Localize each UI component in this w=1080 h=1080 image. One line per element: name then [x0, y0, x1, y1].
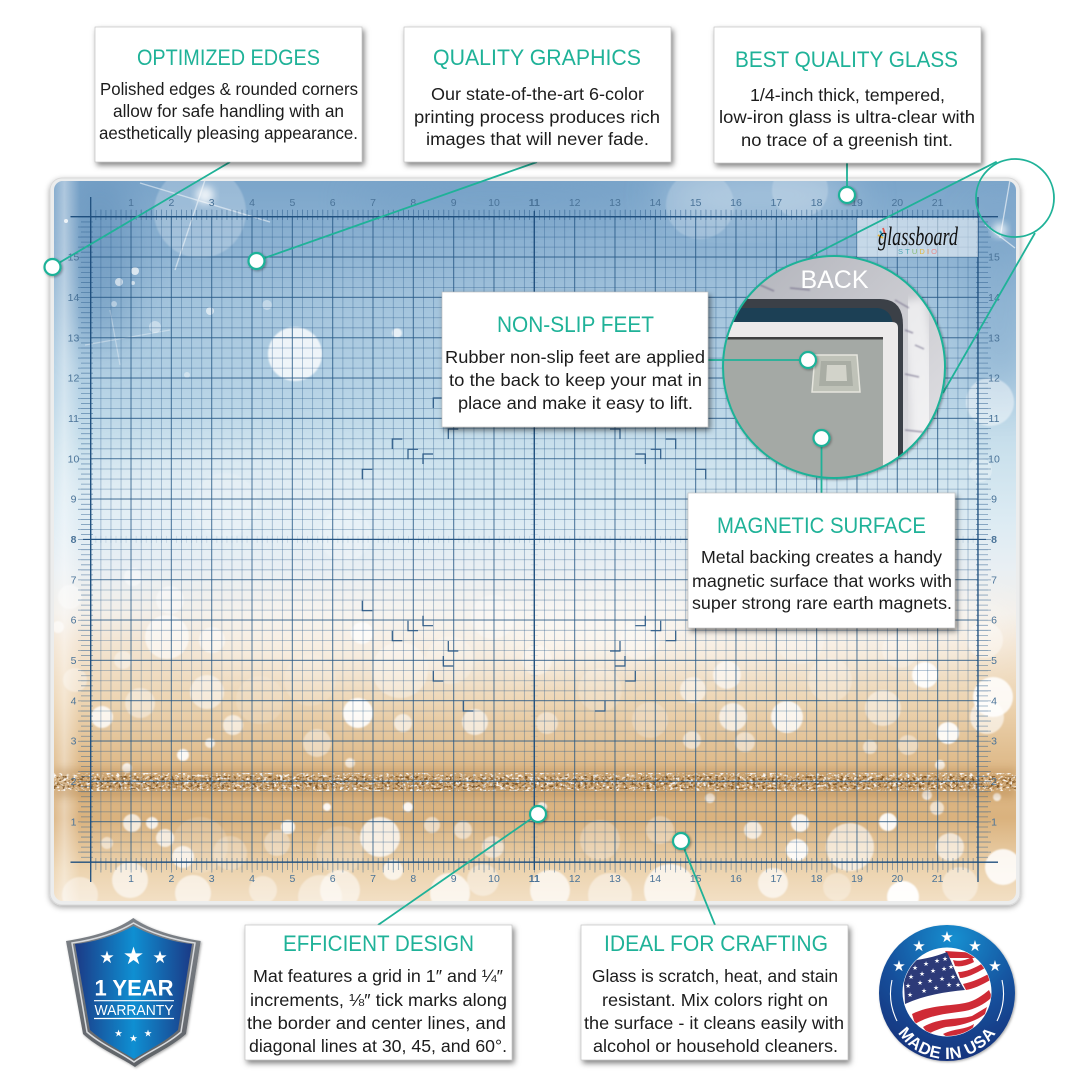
heading: IDEAL FOR CRAFTING: [604, 931, 828, 956]
ruler numbers: top: 14: [649, 197, 661, 209]
ruler numbers: left: 10: [68, 453, 79, 465]
body text: [99, 79, 358, 143]
heading: EFFICIENT DESIGN: [283, 931, 474, 956]
ruler numbers: top: 4: [249, 197, 255, 209]
ruler numbers: right: 3: [991, 736, 997, 748]
ruler numbers: left: 15: [68, 252, 79, 264]
ruler numbers: right: 15: [988, 252, 1000, 264]
body text: [584, 966, 844, 1056]
body text: Rubber non-slip feet are applied: [445, 347, 705, 367]
body text: low-iron glass is ultra-clear with: [719, 107, 975, 127]
ruler numbers: right: 9: [991, 494, 997, 506]
ruler numbers: right: 8: [991, 534, 997, 546]
body text: [445, 347, 705, 413]
ruler numbers: top: 8: [410, 197, 416, 209]
flag: ★: [927, 977, 933, 985]
body text: increments, ⅛″ tick marks along: [250, 990, 507, 1010]
small zoom circle on the corner: [976, 159, 1054, 237]
logo: glassboard studio: S T U D I O: [898, 247, 937, 256]
body text: diagonal lines at 30, 45, and 60°.: [249, 1036, 507, 1056]
body text: the surface - it cleans easily with: [584, 1013, 844, 1033]
panel: efficient design: [245, 925, 512, 1060]
ruler numbers: left: 3: [71, 736, 77, 748]
ruler numbers: right: 11: [989, 413, 1000, 425]
callout dots: [44, 187, 855, 849]
logo: glassboard studio: glassboard: [878, 222, 959, 251]
badge: made in usa: [878, 924, 1018, 1064]
body text: Our state-of-the-art 6-color: [431, 84, 644, 104]
ruler numbers: bottom: 10: [488, 873, 500, 885]
flag: ★: [941, 965, 947, 973]
ruler numbers: left: [68, 252, 79, 828]
ruler numbers: right: 10: [988, 453, 1000, 465]
panel: ideal for crafting: [581, 925, 848, 1060]
body text: Glass is scratch, heat, and stain: [592, 966, 838, 986]
sparkles and light bokeh in the sky: [64, 181, 1016, 584]
flag: ★: [950, 973, 956, 981]
ruler numbers: bottom: 4: [249, 873, 255, 885]
ruler numbers: bottom: 11: [529, 873, 540, 885]
ruler numbers: bottom: 6: [330, 873, 336, 885]
ruler numbers: top: [128, 197, 944, 209]
flag: ★: [907, 991, 913, 999]
flag: ★: [946, 981, 952, 989]
panel: optimized edges: [95, 27, 362, 162]
ruler numbers: bottom: 20: [891, 873, 903, 885]
ruler numbers: right: 2: [991, 776, 997, 788]
ruler numbers: right: 4: [991, 695, 997, 707]
heading: NON-SLIP FEET: [497, 312, 654, 337]
body text: [247, 966, 507, 1056]
warranty text: 1 YEAR: [94, 976, 174, 1000]
stars: ★: [988, 957, 1002, 975]
flag: ★: [905, 982, 911, 990]
magnified back view: [720, 250, 950, 487]
body text: resistant. Mix colors right on: [602, 990, 828, 1010]
flag: ★: [934, 957, 940, 965]
ruler numbers: right: 1: [991, 816, 997, 828]
ruler numbers: bottom: 9: [451, 873, 457, 885]
heading: OPTIMIZED EDGES: [137, 45, 320, 70]
ruler numbers: left: 7: [71, 574, 77, 586]
ruler numbers: top: 11: [529, 197, 540, 209]
panel: non-slip feet: [442, 292, 708, 427]
ruler numbers: bottom: 17: [770, 873, 782, 885]
flag: ★: [912, 964, 918, 972]
body text: [692, 547, 952, 613]
ruler numbers: top: 20: [891, 197, 903, 209]
ruler numbers: bottom: 19: [851, 873, 863, 885]
ruler numbers: bottom: 18: [811, 873, 823, 885]
heading: MAGNETIC SURFACE: [717, 513, 926, 538]
ruler numbers: top: 17: [770, 197, 782, 209]
body text: Polished edges & rounded corners: [100, 79, 358, 99]
stars: ★: [152, 948, 168, 968]
body text: Metal backing creates a handy: [701, 547, 942, 567]
body text: images that will never fade.: [426, 129, 649, 149]
ruler numbers: top: 2: [168, 197, 174, 209]
flag: ★: [939, 975, 945, 983]
printed artwork background: [52, 162, 1036, 919]
ruler numbers: top: 12: [569, 197, 581, 209]
flag: ★: [955, 981, 961, 989]
ruler numbers: bottom: 2: [168, 873, 174, 885]
heading: BEST QUALITY GLASS: [735, 47, 958, 72]
ruler numbers: left: 6: [71, 615, 77, 627]
ruler numbers: top: 1: [128, 197, 134, 209]
body text: magnetic surface that works with: [692, 571, 952, 591]
ruler numbers: top: 16: [730, 197, 742, 209]
ruler numbers: left: 4: [71, 695, 77, 707]
ruler numbers: left: 1: [71, 816, 77, 828]
stars: ★: [114, 1028, 123, 1040]
ruler numbers: top: 10: [488, 197, 500, 209]
panel: magnetic surface: [688, 493, 955, 628]
made in usa text: MADE IN USA: [898, 1026, 996, 1060]
body text: the border and center lines, and: [247, 1013, 506, 1033]
ruler numbers: bottom: 1: [128, 873, 134, 885]
ruler numbers: top: 19: [851, 197, 863, 209]
stars: ★: [968, 937, 982, 955]
ruler numbers: bottom: 13: [609, 873, 621, 885]
ruler numbers: left: 2: [71, 776, 77, 788]
ruler numbers: right: 7: [991, 574, 997, 586]
body text: to the back to keep your mat in: [449, 370, 702, 390]
glass board: [50, 162, 1036, 919]
axis lines: [70, 197, 998, 882]
stars: ★: [123, 942, 144, 970]
flag: ★: [919, 970, 925, 978]
body text: super strong rare earth magnets.: [692, 593, 952, 613]
ruler numbers: left: 13: [68, 332, 79, 344]
stars: ★: [144, 1028, 152, 1040]
ruler numbers: right: 12: [988, 373, 1000, 385]
stars: [99, 942, 168, 1044]
panel: quality graphics: [404, 27, 671, 162]
flag: ★: [917, 979, 923, 987]
ruler numbers: bottom: 7: [370, 873, 376, 885]
heading: back: BACK: [800, 266, 869, 294]
flag: ★: [948, 963, 954, 971]
ruler numbers: top: 6: [330, 197, 336, 209]
ruler numbers: top: 7: [370, 197, 376, 209]
body text: Mat features a grid in 1″ and ¼″: [253, 966, 503, 986]
ruler numbers: bottom: 16: [730, 873, 742, 885]
body text: allow for safe handling with an: [113, 101, 344, 121]
body text: [414, 84, 660, 149]
body text: place and make it easy to lift.: [458, 393, 693, 413]
ruler numbers: right: 13: [988, 332, 1000, 344]
ruler numbers: left: 5: [71, 655, 77, 667]
ruler numbers: top: 5: [289, 197, 295, 209]
diagonal corner marks: [362, 398, 706, 711]
flag: ★: [923, 960, 929, 968]
body text: aesthetically pleasing appearance.: [99, 123, 358, 143]
body text: 1/4-inch thick, tempered,: [750, 85, 945, 105]
ruler numbers: bottom: 14: [649, 873, 661, 885]
ruler numbers: bottom: [128, 873, 944, 885]
ruler numbers: top: 9: [451, 197, 457, 209]
ruler numbers: bottom: 15: [690, 873, 702, 885]
leader lines: [52, 162, 847, 925]
ruler numbers: left: 12: [68, 373, 79, 385]
flag: ★: [930, 967, 936, 975]
panel: best quality glass: [714, 27, 981, 163]
body text: [719, 85, 975, 150]
ruler numbers: left: 8: [71, 534, 77, 546]
ruler numbers: bottom: 12: [569, 873, 581, 885]
ruler numbers: bottom: 3: [209, 873, 215, 885]
tick marks along the border: [84, 212, 985, 867]
ruler numbers: left: 14: [68, 292, 79, 304]
ruler numbers: top: 3: [209, 197, 215, 209]
stars: ★: [129, 1034, 138, 1044]
flag: [904, 951, 991, 1036]
stars: ★: [940, 928, 954, 946]
flag: ★: [908, 973, 914, 981]
body text: printing process produces rich: [414, 107, 660, 127]
ruler numbers: left: 9: [71, 494, 77, 506]
stars: ★: [99, 948, 115, 968]
gold bokeh lights: [54, 601, 1016, 901]
ruler numbers: bottom: 21: [932, 873, 944, 885]
ruler numbers: right: 6: [991, 615, 997, 627]
ruler numbers: left: 11: [68, 413, 79, 425]
glitter band: [54, 768, 1016, 798]
ruler numbers: right: [988, 252, 1000, 828]
magnifier tangent lines: [810, 162, 1035, 393]
badge: 1 year warranty shield: WARRANTY: [94, 1003, 174, 1019]
flag: ★: [942, 955, 948, 963]
flag: ★: [921, 987, 927, 995]
badge: 1 year warranty shield: [66, 918, 201, 1067]
logo: glassboard studio: [857, 218, 978, 257]
ruler numbers: bottom: 5: [289, 873, 295, 885]
body text: no trace of a greenish tint.: [741, 130, 953, 150]
ruler numbers: top: 13: [609, 197, 621, 209]
stars: ★: [912, 937, 926, 955]
ruler numbers: bottom: 8: [410, 873, 416, 885]
ruler numbers: right: 5: [991, 655, 997, 667]
ruler numbers: top: 18: [811, 197, 823, 209]
heading: QUALITY GRAPHICS: [433, 45, 641, 70]
stars: ★: [892, 957, 906, 975]
ruler numbers: right: 14: [988, 292, 1000, 304]
measuring grid: [70, 197, 998, 882]
flag: ★: [933, 984, 939, 992]
body text: alcohol or household cleaners.: [593, 1036, 838, 1056]
ruler numbers: top: 21: [932, 197, 944, 209]
ruler numbers: top: 15: [690, 197, 702, 209]
stars: [892, 928, 1002, 975]
